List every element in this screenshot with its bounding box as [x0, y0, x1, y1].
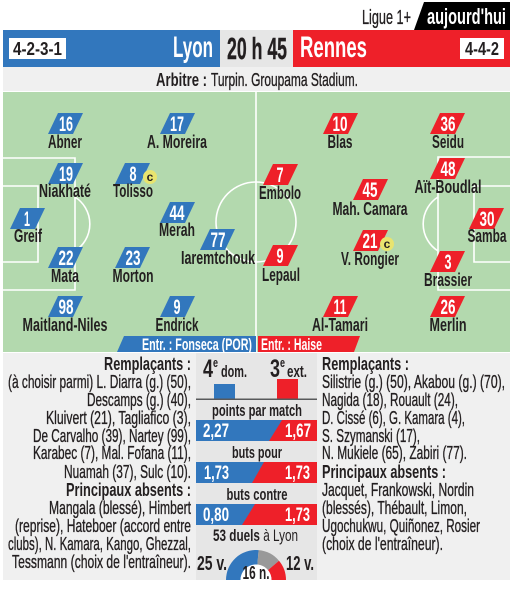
stat: buts pour: 1,73: [204, 463, 229, 484]
Lyon substitutes and absentees: Remplaçants :: [104, 353, 191, 374]
player: Maitland-Niles: 98: [58, 296, 74, 319]
player: Mata: 22: [58, 247, 74, 270]
player: A. Moreira: [147, 113, 207, 152]
stat: buts contre: 1,73: [285, 505, 310, 526]
player: Brassier: Brassier: [424, 269, 472, 290]
bottom panel background: [3, 353, 510, 580]
football pitch: [3, 92, 510, 352]
player: Abner: 16: [59, 113, 73, 136]
player: Seidu: [430, 113, 465, 152]
player: Seidu: Seidu: [432, 131, 464, 152]
player: Mah. Camara: [332, 179, 408, 219]
match header band: Rennes: [300, 31, 367, 64]
Lyon substitutes and absentees: (reprise), Hateboer (accord entre: [15, 515, 191, 536]
Rennes substitutes and absentees: [322, 353, 505, 554]
player: Maitland-Niles: Maitland-Niles: [22, 314, 108, 335]
player: Maitland-Niles: [22, 296, 108, 335]
player: Al-Tamari: Al-Tamari: [312, 314, 368, 335]
Rennes substitutes and absentees: S. Szymanski (17),: [322, 425, 420, 446]
stat: buts contre: 0,80: [203, 505, 229, 526]
Lyon substitutes and absentees: Nuamah (37), Sulc (10).: [64, 461, 191, 482]
player: Tolisso, captain: [113, 163, 157, 201]
Lyon lineup: [10, 113, 256, 354]
player: Merlin: [430, 296, 466, 335]
league position comparison: ext.: [287, 362, 307, 381]
head-to-head duels title: 53 duels à Lyon: [213, 526, 298, 545]
head-to-head semi-donut: 25 v.: [197, 553, 227, 575]
head-to-head semi-donut: [197, 550, 314, 583]
player: A. Moreira: 17: [170, 113, 184, 136]
player: Merah: 44: [170, 202, 185, 225]
player: Morton: [112, 247, 154, 286]
league position comparison: [196, 355, 317, 400]
Lyon substitutes and absentees: Kluivert (21), Tagliafico (3),: [46, 407, 191, 428]
player: Merah: [159, 202, 195, 240]
league position comparison: dom.: [221, 362, 247, 381]
player: Merlin: Merlin: [430, 314, 466, 335]
player: V. Rongier, captain: [341, 230, 399, 269]
player: Morton: Morton: [112, 265, 154, 286]
player: Abner: Abner: [48, 131, 82, 152]
player: Aït-Boudlal: [414, 158, 482, 197]
player: Merah: Merah: [159, 219, 195, 240]
player: Mah. Camara: 45: [362, 179, 378, 202]
section tag: Ligue 1+ aujourd'hui: [362, 2, 510, 30]
player: Tolisso, captain: Tolisso: [113, 180, 153, 201]
player: Brassier: 3: [444, 251, 452, 274]
player: Morton: 23: [126, 247, 140, 270]
player: V. Rongier, captain: c: [384, 237, 391, 251]
player: Endrick: 9: [174, 296, 180, 319]
player: Niakhaté: 19: [59, 163, 73, 186]
coach: Haise: Entr. : Haise: [261, 335, 322, 354]
player: Endrick: Endrick: [156, 314, 199, 335]
player: Iaremtchouk: [181, 229, 255, 268]
player: Blas: 10: [332, 113, 348, 136]
referee and stadium line: [3, 67, 510, 91]
player: Tolisso, captain: 8: [130, 163, 137, 186]
player: Blas: [323, 113, 358, 152]
player: Iaremtchouk: 77: [210, 229, 226, 252]
player: Samba: [468, 208, 507, 246]
player: Lepaul: 9: [276, 245, 284, 268]
player: Al-Tamari: [312, 296, 368, 335]
Lyon substitutes and absentees: Mangala (blessé), Himbert: [49, 497, 191, 518]
Lyon substitutes and absentees: De Carvalho (39), Nartey (99),: [33, 425, 191, 446]
referee and stadium line: Arbitre :: [156, 69, 207, 90]
section tag: Ligue 1+ aujourd'hui: Ligue 1+: [362, 7, 411, 29]
player: A. Moreira: A. Moreira: [147, 131, 207, 152]
player: Greif: [10, 208, 45, 246]
statistics column: [196, 353, 317, 583]
player: Lepaul: [262, 245, 300, 285]
match header band: Lyon: [173, 31, 213, 64]
Lyon substitutes and absentees: clubs), N. Kamara, Kango, Ghezzal,: [8, 533, 191, 554]
league position comparison: 4: [203, 355, 213, 383]
stat: buts pour: 1,73: [285, 463, 310, 484]
player: Blas: Blas: [328, 131, 352, 152]
head-to-head semi-donut: 12 v.: [286, 553, 314, 575]
player: Mata: Mata: [51, 265, 79, 286]
league position comparison: 3: [270, 355, 280, 383]
stat: points par match: 1,67: [285, 421, 311, 442]
player: Aït-Boudlal: Aït-Boudlal: [414, 176, 482, 197]
player: Samba: 30: [480, 208, 494, 231]
stat: buts pour: [196, 443, 317, 484]
player: Greif: Greif: [14, 225, 43, 246]
player: Abner: [48, 113, 83, 152]
Lyon substitutes and absentees: [8, 353, 191, 572]
stat: buts contre: [196, 485, 317, 526]
Rennes substitutes and absentees: (choix de l'entraîneur).: [322, 533, 443, 554]
player: Tolisso, captain: c: [147, 170, 154, 184]
stat: buts pour: buts pour: [232, 443, 282, 462]
Lyon substitutes and absentees: Tessmann (choix de l'entraîneur).: [12, 551, 191, 572]
coach: Fonseca: [117, 335, 256, 354]
match header band: 4-4-2: [465, 39, 499, 59]
player: Embolo: 7: [276, 164, 284, 187]
referee and stadium line: Turpin. Groupama Stadium.: [211, 69, 358, 90]
match header band: [3, 30, 510, 67]
player: Merlin: 26: [440, 296, 456, 319]
player: Brassier: [424, 251, 472, 290]
player: Greif: 1: [24, 208, 30, 231]
player: Endrick: [156, 296, 199, 335]
player: Niakhaté: [39, 163, 91, 201]
league position comparison: e: [280, 355, 285, 370]
Rennes lineup: [258, 113, 507, 354]
stat: buts contre: buts contre: [226, 485, 288, 504]
player: Iaremtchouk: Iaremtchouk: [181, 247, 255, 268]
Lyon substitutes and absentees: Principaux absents :: [66, 479, 191, 500]
league position comparison: e: [213, 355, 218, 370]
player: Niakhaté: Niakhaté: [39, 180, 91, 201]
player: Mata: [48, 247, 83, 286]
player: Al-Tamari: 11: [334, 296, 347, 319]
stat: points par match: [196, 401, 317, 442]
player: Mah. Camara: Mah. Camara: [332, 198, 408, 219]
Rennes substitutes and absentees: Remplaçants :: [322, 353, 409, 374]
player: Seidu: 36: [440, 113, 456, 136]
Lyon substitutes and absentees: Descamps (g.) (40),: [87, 389, 191, 410]
stat: points par match: points par match: [212, 401, 302, 420]
coach: Fonseca: Entr. : Fonseca (POR): [142, 335, 252, 354]
stat: points par match: 2,27: [203, 421, 229, 442]
Lyon substitutes and absentees: (à choisir parmi) L. Diarra (g.) (50),: [8, 371, 191, 392]
player: V. Rongier, captain: 21: [362, 230, 378, 253]
player: Lepaul: Lepaul: [262, 264, 300, 285]
Lyon substitutes and absentees: Karabec (7), Mal. Fofana (11),: [33, 442, 191, 463]
player: V. Rongier, captain: V. Rongier: [341, 248, 399, 269]
Rennes substitutes and absentees: Principaux absents :: [322, 461, 446, 482]
player: Aït-Boudlal: 48: [440, 158, 456, 181]
match header band: 20 h 45: [227, 31, 287, 66]
player: Embolo: [259, 164, 301, 203]
match header band: 4-2-3-1: [13, 39, 62, 59]
head-to-head semi-donut: 16 n.: [242, 563, 270, 583]
player: Embolo: Embolo: [259, 182, 301, 203]
